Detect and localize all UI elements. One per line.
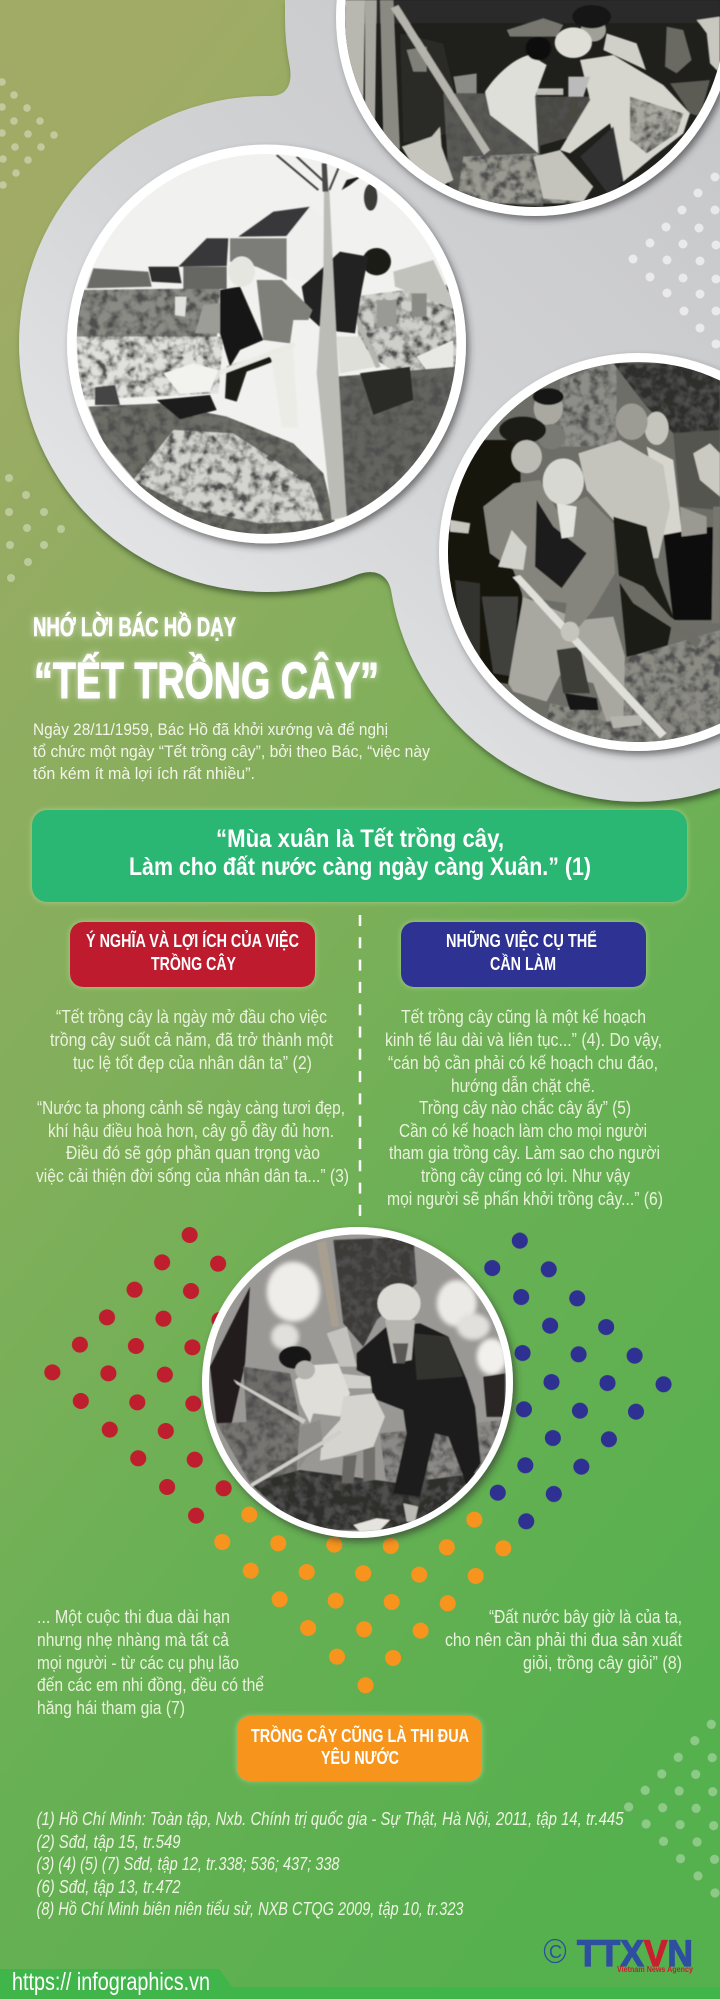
lower right quote: “Đất nước bây giờ là của ta, <box>489 1607 682 1627</box>
heading: concrete tasks: CẦN LÀM <box>490 953 556 974</box>
left column text: tục lệ tốt đẹp của nhân dân ta” (2) <box>73 1053 312 1073</box>
intro text: tốn kém ít mà lợi ích rất nhiều”. <box>33 765 255 783</box>
right column text: “cán bộ cần phải có kế hoạch chu đáo, <box>388 1053 658 1073</box>
heading: meaning and benefits: Ý NGHĨA VÀ LỢI ÍCH CỦA VIỆC <box>86 930 299 951</box>
left column text <box>36 1007 349 1186</box>
left column text: khí hậu điều hoà hơn, cây gỗ đầy đủ hơn. <box>48 1120 334 1141</box>
left column text: Điều đó sẽ góp phần quan trọng vào <box>66 1143 320 1163</box>
quote banner: Làm cho đất nước càng ngày càng Xuân.” (1) <box>129 853 591 881</box>
gray blob panel <box>19 0 720 802</box>
heading: meaning and benefits <box>70 922 315 987</box>
lower left quote: hăng hái tham gia (7) <box>37 1698 185 1718</box>
photo: right circle, old man digging with crowd <box>439 353 720 757</box>
heading: concrete tasks <box>401 922 646 987</box>
footer band <box>0 1969 720 1999</box>
heading: meaning and benefits: TRỒNG CÂY <box>151 953 237 974</box>
right column text <box>385 1007 663 1209</box>
references: (2) Sđd, tập 15, tr.549 <box>36 1832 180 1852</box>
right column text: hướng dẫn chặt chẽ. <box>451 1075 595 1096</box>
right column text: tham gia trồng cây. Làm sao cho người <box>389 1143 660 1163</box>
lower left quote: ... Một cuộc thi đua dài hạn <box>37 1607 230 1627</box>
lower right quote: cho nên cần phải thi đua sản xuất <box>445 1630 682 1650</box>
lower right quote <box>445 1607 682 1673</box>
decorative dots bottom right <box>624 1720 720 1898</box>
right column text: kinh tế lâu dài và liên tục...” (4). Do vậy, <box>385 1030 662 1050</box>
center dashed divider <box>359 915 361 1240</box>
title: NHỚ LỜI BÁC HỒ DẠY <box>33 611 236 642</box>
title <box>33 611 379 709</box>
lower left quote: nhưng nhẹ nhàng mà tất cả <box>37 1630 230 1650</box>
lower left quote: mọi người - từ các cụ phụ lão <box>37 1653 239 1673</box>
left column text: “Nước ta phong cảnh sẽ ngày càng tươi đẹp, <box>37 1098 345 1118</box>
photo: large circle, two men planting with house <box>67 144 470 550</box>
intro text: tổ chức một ngày “Tết trồng cây”, bởi theo Bác, “việc này <box>33 743 431 761</box>
references <box>36 1809 624 1919</box>
red dot diamond <box>44 1227 232 1524</box>
orange dot diamond <box>214 1507 511 1693</box>
decorative dots top-left <box>0 78 58 189</box>
intro text: Ngày 28/11/1959, Bác Hồ đã khởi xướng và để nghị <box>33 721 388 739</box>
quote banner: “Mùa xuân là Tết trồng cây, <box>216 825 504 853</box>
lower right quote: giỏi, trồng cây giỏi” (8) <box>523 1653 682 1673</box>
decorative dots left middle <box>5 474 65 582</box>
references: (8) Hồ Chí Minh biên niên tiểu sử, NXB CTQG 2009, tập 10, tr.323 <box>36 1899 464 1919</box>
lower left quote <box>37 1607 264 1718</box>
left column text: việc cải thiện đời sống của nhân dân ta...” (3) <box>36 1166 349 1186</box>
logo: TTXVN: Vietnam News Agency <box>617 1965 693 1974</box>
right column text: Trồng cây nào chắc cây ấy” (5) <box>419 1097 631 1118</box>
blue dot diamond <box>484 1233 672 1529</box>
intro text <box>33 721 431 783</box>
heading: emulation <box>237 1716 482 1781</box>
right column text: mọi người sẽ phấn khởi trồng cây...” (6) <box>387 1189 663 1209</box>
lower left quote: đến các em nhi đồng, đều có thể <box>37 1675 264 1695</box>
heading: emulation: TRỒNG CÂY CŨNG LÀ THI ĐUA <box>251 1725 469 1746</box>
right column text: trồng cây cũng có lợi. Như vậy <box>421 1166 630 1186</box>
logo: TTXVN: TTXVN <box>577 1933 693 1974</box>
heading: emulation: YÊU NƯỚC <box>321 1747 399 1768</box>
left column text: trồng cây suốt cả năm, đã trở thành một <box>50 1030 333 1050</box>
right column text: Tết trồng cây cũng là một kế hoạch <box>401 1007 646 1027</box>
title: “TẾT TRỒNG CÂY” <box>34 651 379 709</box>
left column text: “Tết trồng cây là ngày mở đầu cho việc <box>56 1007 327 1027</box>
references: (3) (4) (5) (7) Sđd, tập 12, tr.338; 536; 437; 338 <box>36 1854 340 1874</box>
website url: https:// infographics.vn <box>12 1968 210 1996</box>
references: (6) Sđd, tập 13, tr.472 <box>36 1877 180 1897</box>
photo: top circle, planting tree with group <box>330 0 720 220</box>
decorative dots on gray panel <box>628 172 720 348</box>
heading: concrete tasks: NHỮNG VIỆC CỤ THỂ <box>446 930 597 951</box>
right column text: Cần có kế hoạch làm cho mọi người <box>399 1121 647 1141</box>
photo: center circle, old man and child digging <box>202 1227 513 1538</box>
quote banner <box>32 810 687 902</box>
logo: TTXVN: C <box>549 1942 562 1962</box>
